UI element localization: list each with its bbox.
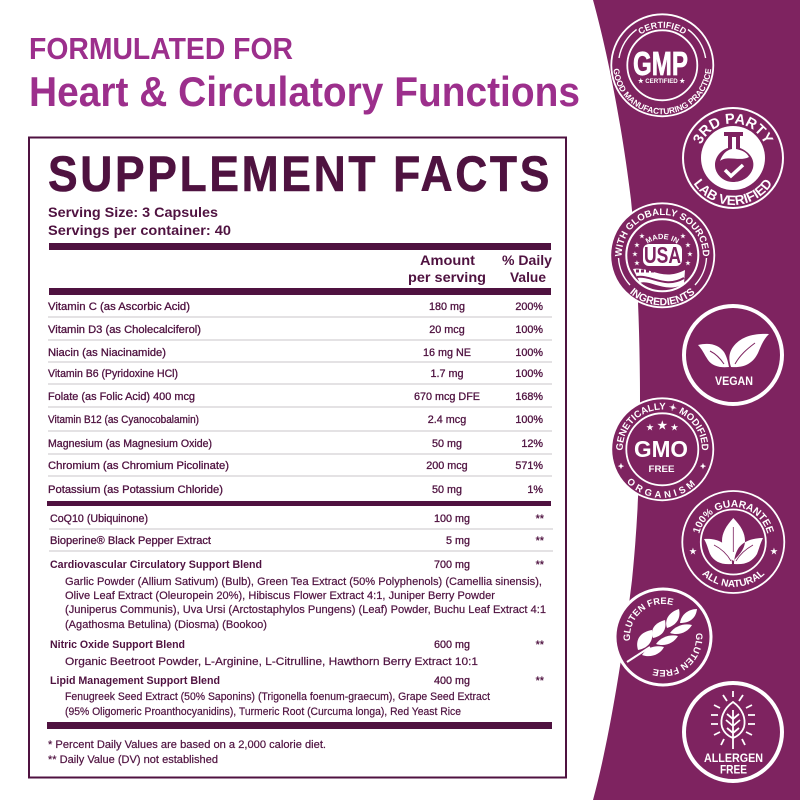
blend names: Lipid Management Support Blend (50, 675, 220, 687)
icon: stars: ★ (632, 251, 638, 258)
blend ingredients: Fenugreek Seed Extract (50% Saponins) (Trigonella foenum-graecum), Grape Seed Extract (65, 691, 490, 703)
daily value column (515, 301, 543, 496)
heading (29, 32, 580, 115)
badge: 100% guarantee all natural: 100% GUARANTEE (693, 500, 774, 534)
icon: stars: ★ (680, 233, 686, 240)
vitamin and mineral rows: Vitamin B12 (as Cyanocobalamin) (48, 414, 199, 426)
blend ingredients: Olive Leaf Extract (Oleuropein 20%), Hibiscus Flower Extract 4:1, Juniper Berry Powder (65, 590, 495, 602)
heading: Heart & Circulatory Functions (29, 68, 580, 115)
column headers: Value (510, 269, 546, 285)
icon: stars: ★ (687, 251, 693, 258)
vitamin and mineral rows: Vitamin C (as Ascorbic Acid) (48, 301, 190, 313)
amount column (414, 301, 480, 496)
vitamin and mineral rows: Niacin (as Niacinamide) (48, 347, 166, 359)
blend ingredients: Organic Beetroot Powder, L-Arginine, L-Citrulline, Hawthorn Berry Extract 10:1 (65, 656, 478, 668)
amount column: 670 mcg DFE (414, 391, 480, 403)
blend amounts: ** (536, 513, 545, 525)
icon: wheat (627, 609, 697, 662)
icon: stars: ★ (634, 242, 640, 249)
vitamin and mineral rows (48, 301, 229, 496)
icon: flask (715, 132, 753, 182)
column headers: % Daily (502, 252, 552, 268)
badge: gluten free: GLUTEN FREE (623, 598, 674, 641)
badge: GMP certified: CERTIFIED (638, 22, 686, 34)
badge: allergen free (684, 683, 782, 781)
badge: GMO free: GENETICALLY ✦ MODIFIED (616, 402, 708, 450)
daily value column: 1% (527, 484, 543, 496)
panel: purple sidebar (593, 0, 800, 800)
blend amounts: ** (536, 535, 545, 547)
icon: stars: ★ (685, 260, 691, 267)
amount column: 2.4 mcg (428, 414, 466, 426)
badge: made in USA: MADE IN (645, 234, 680, 244)
blend names (50, 559, 262, 687)
badge: GMO free: ✦ (618, 462, 625, 471)
badge: 100% guarantee all natural: ALL NATURAL (702, 570, 765, 588)
badge: 100% guarantee all natural: ★ (689, 547, 697, 556)
title: SUPPLEMENT FACTS (48, 146, 552, 202)
badge: GMP certified: ★ CERTIFIED ★ (638, 77, 686, 85)
daily value column: 100% (515, 347, 543, 359)
badge: 100% guarantee all natural (681, 490, 786, 594)
badge: 3rd party lab verified: LAB VERIFIED (694, 178, 771, 206)
blend ingredients (65, 576, 546, 718)
heading: FORMULATED FOR (29, 32, 293, 66)
blend amounts: 700 mg (434, 559, 470, 571)
badge: GMO free: FREE (648, 464, 674, 475)
row separators (48, 317, 553, 551)
vitamin and mineral rows: Chromium (as Chromium Picolinate) (48, 460, 229, 472)
icon: stars: ★ (685, 242, 691, 249)
icon: lotus leaves (704, 518, 763, 564)
column headers: per serving (408, 269, 486, 285)
badge: made in USA: INGREDIENTS (630, 288, 694, 306)
footnotes: * Percent Daily Values are based on a 2,000 calorie diet. (48, 739, 326, 751)
serving info: Servings per container: 40 (48, 222, 231, 238)
blend amounts: ** (536, 675, 545, 687)
serving info: Serving Size: 3 Capsules (48, 204, 218, 220)
footnotes (48, 739, 326, 766)
badge: GMO free: GMO (634, 436, 688, 462)
icon: stars: ★ (646, 423, 654, 432)
daily value column: 571% (515, 460, 543, 472)
other ingredients rows (50, 513, 211, 547)
icon: flag ribbon (633, 269, 685, 288)
icon: stars: ★ (657, 420, 667, 432)
column headers (408, 252, 552, 285)
amount column: 16 mg NE (423, 347, 471, 359)
blend amounts: ** (536, 639, 545, 651)
badge: GMP certified: GOOD MANUFACTURING PRACTICE (614, 68, 712, 114)
vitamin and mineral rows: Folate (as Folic Acid) 400 mcg (48, 391, 195, 403)
amount column: 50 mg (432, 438, 462, 450)
column headers: Amount (420, 252, 475, 268)
vitamin and mineral rows: Potassium (as Potassium Chloride) (48, 484, 223, 496)
badge: made in USA: WITH GLOBALLY SOURCED (614, 208, 710, 256)
icon: leaf with rays (711, 691, 755, 749)
panel: supplement facts (29, 138, 566, 778)
badge: vegan: VEGAN (715, 376, 753, 388)
daily value column: 12% (521, 438, 543, 450)
icon: stars: ★ (639, 233, 645, 240)
vitamin and mineral rows: Vitamin D3 (as Cholecalciferol) (48, 324, 201, 336)
blend ingredients: (Juniperus Communis), Uva Ursi (Arctostaphylos Pungens) (Leaf) Powder, Buchu Leaf Extract 4:1 (65, 604, 546, 616)
vitamin and mineral rows: Magnesium (as Magnesium Oxide) (48, 438, 212, 450)
blend amounts: 600 mg (434, 639, 470, 651)
badge: GMO free: ORGANISM (628, 478, 696, 498)
daily value column: 200% (515, 301, 543, 313)
USA label: USA (644, 242, 681, 268)
badge: GMP certified: GMP (633, 45, 688, 82)
icon: stars: ★ (671, 423, 679, 432)
blend names: Cardiovascular Circulatory Support Blend (50, 559, 262, 571)
amount column: 1.7 mg (430, 368, 464, 380)
icon: stars (646, 420, 679, 432)
amount column: 20 mcg (429, 324, 465, 336)
blend ingredients: (95% Oligomeric Proanthocyanidins), Turmeric Root (Curcuma longa), Red Yeast Rice (65, 706, 461, 718)
badge: made in USA (611, 202, 716, 308)
badge: GMP certified (610, 13, 714, 118)
blend amounts: 100 mg (434, 513, 470, 525)
blend ingredients: (Agathosma Betulina) (Diosma) (Bookoo) (65, 619, 267, 631)
blend amounts: ** (536, 559, 545, 571)
blend amounts: 400 mg (434, 675, 470, 687)
other ingredients rows: Bioperine® Black Pepper Extract (50, 535, 211, 547)
blend names: Nitric Oxide Support Blend (50, 639, 185, 651)
badge: 100% guarantee all natural: ★ (770, 547, 778, 556)
badge: GMO free: ✦ (700, 462, 707, 471)
icon: stars (632, 233, 693, 267)
badge: 3rd party lab verified: 3RD PARTY (693, 114, 774, 144)
amount column: 200 mcg (426, 460, 468, 472)
badge: GMO free (612, 397, 714, 502)
badge: allergen free: ALLERGEN (704, 753, 763, 765)
table divider bars (47, 243, 552, 729)
amount column: 50 mg (432, 484, 462, 496)
serving info (48, 204, 231, 238)
vitamin and mineral rows: Vitamin B6 (Pyridoxine HCl) (48, 368, 178, 380)
icon: stars: ★ (634, 260, 640, 267)
badge: vegan (684, 306, 782, 404)
badge: gluten free: GLUTEN FREE (652, 633, 703, 676)
blend ingredients: Garlic Powder (Allium Sativum) (Bulb), Green Tea Extract (50% Polyphenols) (Camellia sinensis), (65, 576, 542, 588)
daily value column: 100% (515, 414, 543, 426)
footnotes: ** Daily Value (DV) not established (48, 754, 218, 766)
blend amounts: 5 mg (446, 535, 470, 547)
amount column: 180 mg (429, 301, 465, 313)
badge: allergen free: FREE (720, 764, 747, 776)
badge: gluten free (616, 588, 712, 686)
blend amounts (434, 513, 545, 687)
badge: 3rd party lab verified (682, 107, 784, 209)
panel border (29, 138, 566, 778)
daily value column: 168% (515, 391, 543, 403)
other ingredients rows: CoQ10 (Ubiquinone) (50, 513, 148, 525)
daily value column: 100% (515, 324, 543, 336)
icon: leaves (698, 334, 769, 367)
daily value column: 100% (515, 368, 543, 380)
